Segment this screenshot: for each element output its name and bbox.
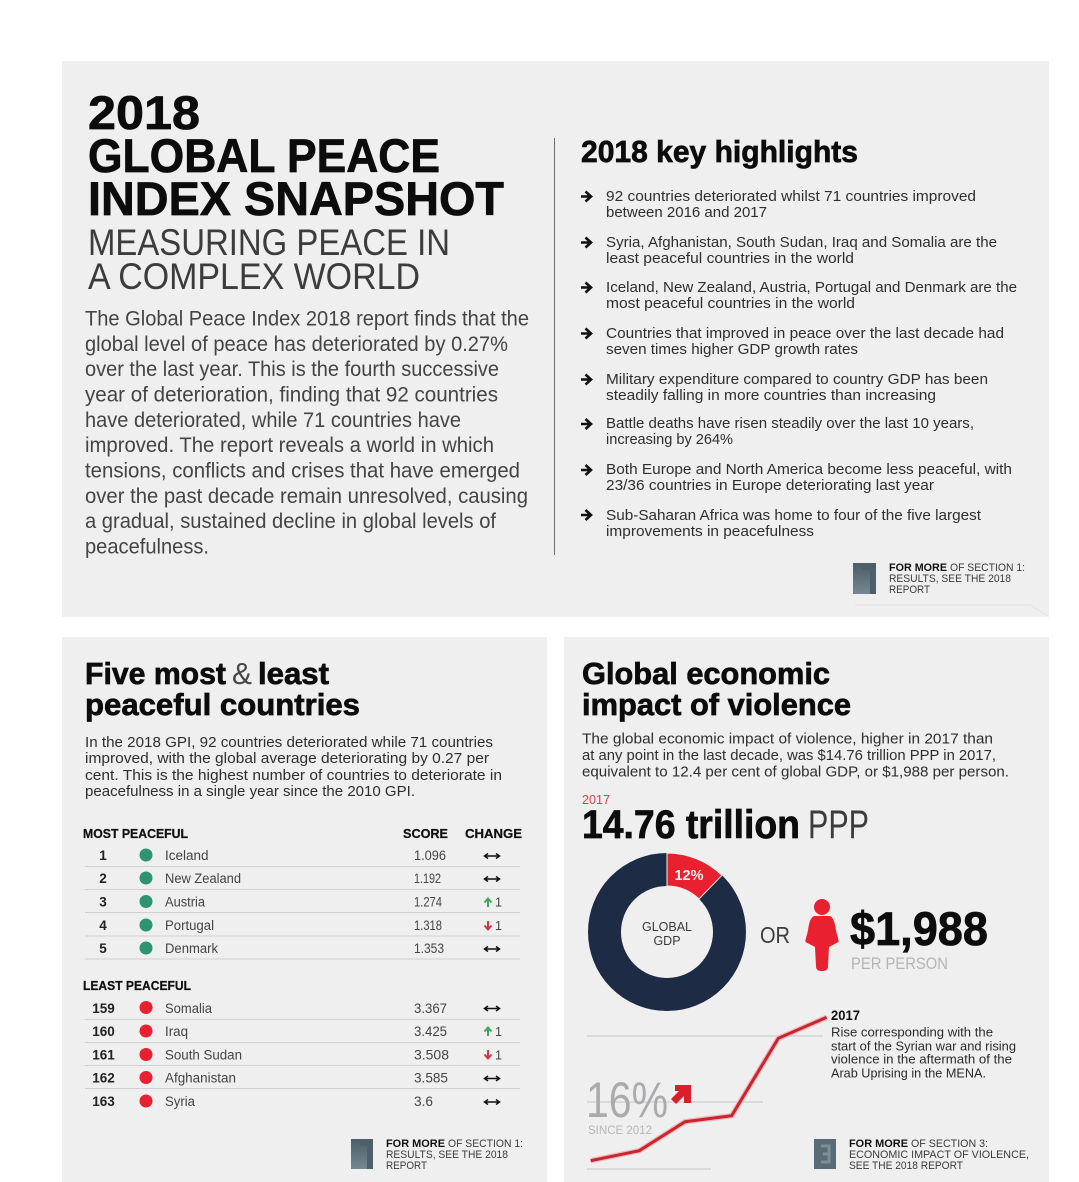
table: most peaceful: CHANGE [465,826,522,841]
table: most peaceful: 4 [99,918,107,933]
key highlights list: most peaceful countries in the world [606,295,855,312]
table: least peaceful: LEAST PEACEFUL [83,978,191,993]
heading: five most and least [85,656,360,722]
intro text block: tensions, conflicts and crises that have emerged [85,458,520,482]
table: least peaceful: Iraq [165,1024,188,1039]
intro text: peacefulness in a single year since the 2010 GPI. [85,783,415,800]
intro text block: The Global Peace Index 2018 report finds that the [85,306,529,330]
table: least peaceful: 160 [92,1024,115,1039]
intro text block [85,306,529,558]
table: least peaceful: 3.6 [414,1094,433,1109]
table: most peaceful: 1 [99,848,107,863]
table: most peaceful: Portugal [165,918,214,933]
table: most peaceful: 1 [495,919,502,933]
intro text [85,734,502,800]
table: least peaceful: 159 [92,1001,115,1016]
key highlights list: least peaceful countries in the world [606,250,854,267]
icon: person [805,899,839,971]
table: least peaceful: 162 [92,1070,115,1086]
headline figure: PPP [808,803,869,847]
key highlights list: Syria, Afghanistan, South Sudan, Iraq and Somalia are the [606,234,997,251]
table: least peaceful: 1 [495,1025,502,1039]
key highlights list: Iceland, New Zealand, Austria, Portugal and Denmark are the [606,279,1017,296]
key highlights list: increasing by 264% [606,431,733,448]
callout: section 1 reference: OF SECTION 1: [950,562,1025,574]
intro text [582,730,1009,780]
key highlights list: 92 countries deteriorated whilst 71 countries improved [606,188,976,205]
line chart: rise since 2012 [586,1017,827,1169]
callout: section 3 reference: ECONOMIC IMPACT OF VIOLENCE, [849,1149,1029,1161]
key highlights list: between 2016 and 2017 [606,204,767,221]
intro text block: year of deterioration, finding that 92 countries [85,382,498,406]
subtitle: A COMPLEX WORLD [88,256,420,297]
annotation: 2017 rise: Arab Uprising in the MENA. [831,1066,986,1080]
donut chart: 12% of global GDP: GDP [653,934,681,948]
title: GLOBAL PEACE [88,129,440,182]
table: least peaceful: 3.425 [414,1024,447,1039]
key highlights list: 23/36 countries in Europe deteriorating last year [606,477,934,494]
label: or: OR [760,922,790,948]
annotation: 2017 rise: Rise corresponding with the [831,1024,993,1040]
callout: section 1 reference: REPORT [386,1160,427,1172]
intro text: improved, with the global average deteriorating by 0.27 per [85,750,489,767]
table: most peaceful: 1.096 [414,848,446,863]
table: least peaceful: 163 [92,1094,115,1109]
table: most peaceful: SCORE [403,826,448,841]
heading: five most and least: peaceful countries [85,687,360,722]
annotation: 2017 rise [831,1008,1016,1080]
title: INDEX SNAPSHOT [88,172,504,225]
table: least peaceful: 161 [92,1048,115,1062]
annotation: 2017 rise: violence in the aftermath of the [831,1052,1012,1066]
heading: global economic impact: impact of violence [582,687,851,722]
figure: dollars per person: $1,988 [850,902,988,955]
table: most peaceful: 3 [99,894,107,910]
intro text: equivalent to 12.4 per cent of global GDP, or $1,988 per person. [582,764,1009,780]
intro text: In the 2018 GPI, 92 countries deteriorated while 71 countries [85,734,493,751]
intro text block: have deteriorated, while 71 countries have [85,408,461,432]
intro text: cent. This is the highest number of countries to deteriorate in [85,767,502,784]
key highlights list: seven times higher GDP growth rates [606,341,858,358]
figure: dollars per person: PER PERSON [851,954,948,973]
table: most peaceful: 1 [495,896,502,910]
intro text block: over the last year. This is the fourth successive [85,357,499,381]
headline figure: 14.76 trillion [582,803,800,847]
table: most peaceful: 5 [99,941,107,956]
callout: section 1 reference: RESULTS, SEE THE 2018 [386,1149,508,1161]
donut chart: 12% of global GDP [604,853,730,994]
table: least peaceful [83,978,520,1109]
intro text block: global level of peace has deteriorated by 0.27% [85,332,508,356]
table: most peaceful: Austria [165,894,205,910]
table: most peaceful: Denmark [165,941,218,956]
table: least peaceful: 3.367 [414,1001,447,1016]
callout: section 1 reference: OF SECTION 1: [448,1138,523,1150]
key highlights list: Battle deaths have risen steadily over the last 10 years, [606,415,974,432]
table: least peaceful: South Sudan [165,1048,242,1062]
callout: section 3 reference: SEE THE 2018 REPORT [849,1160,963,1172]
heading: global economic impact: Global economic [582,656,830,691]
intro text block: over the past decade remain unresolved, causing [85,484,528,508]
key highlights list: Military expenditure compared to country GDP has been [606,371,988,388]
donut chart: 12% of global GDP: GLOBAL [642,920,692,934]
icon: section 1 marker [853,563,876,594]
title: 2018 [88,86,200,139]
intro text block: a gradual, sustained decline in global levels of [85,509,496,533]
intro text block: improved. The report reveals a world in which [85,433,494,457]
table: least peaceful: 3.508 [414,1048,449,1062]
table: most peaceful: Iceland [165,848,209,863]
line chart: rise since 2012: 16% [586,1072,668,1128]
subtitle: MEASURING PEACE IN [88,222,450,263]
table: least peaceful: Somalia [165,1001,212,1016]
table: least peaceful: 1 [495,1048,502,1062]
heading: global economic impact [582,656,851,722]
heading: five most and least: least [258,656,329,691]
table: most peaceful [83,826,522,959]
annotation: 2017 rise: 2017 [831,1008,860,1023]
panel: snapshot [62,61,1049,617]
table: most peaceful: New Zealand [165,871,241,886]
callout: section 3 reference: OF SECTION 3: [911,1138,988,1150]
callout: section 1 reference: FOR MORE [386,1138,445,1150]
table: least peaceful: Afghanistan [165,1070,236,1086]
key highlights list: steadily falling in more countries than increasing [606,387,936,404]
intro text: The global economic impact of violence, higher in 2017 than [582,730,993,748]
subtitle [88,222,450,297]
callout: section 1 reference: RESULTS, SEE THE 2018 [889,573,1011,585]
key highlights list: Sub-Saharan Africa was home to four of the five largest [606,507,982,524]
table: most peaceful: 1.192 [414,871,441,886]
key highlights list: Both Europe and North America become less peaceful, with [606,461,1012,478]
intro text block: peacefulness. [85,534,209,558]
key highlights list: Countries that improved in peace over the last decade had [606,325,1004,342]
table: most peaceful: 2 [99,871,107,886]
table: least peaceful: Syria [165,1094,195,1109]
intro text: at any point in the last decade, was $14.76 trillion PPP in 2017, [582,747,996,764]
table: most peaceful: 1.353 [414,941,444,956]
annotation: 2017 rise: start of the Syrian war and rising [831,1038,1016,1054]
icon: section 1 marker [351,1139,373,1169]
callout: section 3 reference [849,1138,1029,1172]
key highlights list: improvements in peacefulness [606,523,814,540]
heading: key highlights: 2018 key highlights [581,134,858,169]
callout: section 1 reference [889,562,1025,596]
table: least peaceful: 3.585 [414,1070,448,1086]
callout: section 3 reference: FOR MORE [849,1138,908,1150]
heading: five most and least: & [232,656,252,691]
heading: five most and least: Five most [85,656,226,691]
panel: global economic impact of violence [564,637,1049,1182]
icon: section 3 marker [814,1139,836,1169]
table: most peaceful: 1.274 [414,894,442,910]
panel: five most and least peaceful countries [62,637,547,1182]
title [88,86,504,225]
table: most peaceful: MOST PEACEFUL [83,826,188,841]
callout: section 1 reference [386,1138,523,1172]
table: most peaceful: 1.318 [414,918,442,933]
key highlights list [581,188,1017,540]
donut chart: 12% of global GDP: 12% [674,868,704,884]
year label: 2017 [582,792,610,807]
line chart: rise since 2012: SINCE 2012 [588,1123,652,1137]
callout: section 1 reference: FOR MORE [889,562,947,574]
callout: section 1 reference: REPORT [889,584,930,596]
